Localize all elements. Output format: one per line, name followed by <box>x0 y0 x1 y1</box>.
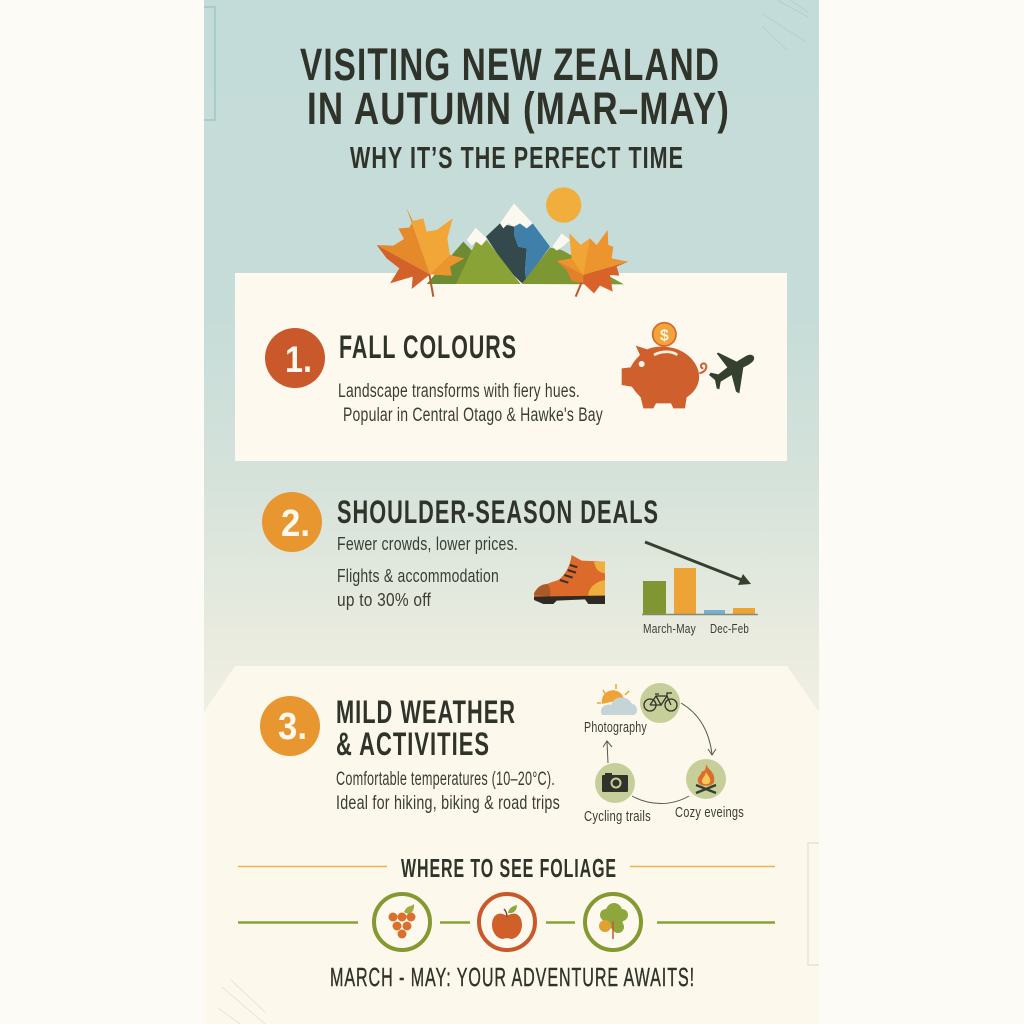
heading: mild weather and activities: & ACTIVITIES <box>336 726 490 762</box>
icon: apple <box>479 894 535 950</box>
panel: mild weather section <box>260 694 560 814</box>
text: deals description <box>337 533 518 610</box>
icon: mountains <box>427 203 624 284</box>
heading: mild weather and activities: MILD WEATHER <box>336 694 516 730</box>
icon: right maple leaf <box>557 230 628 297</box>
subtitle: WHY IT’S THE PERFECT TIME <box>350 140 684 175</box>
heading: mild weather and activities <box>336 694 516 762</box>
icon: plane <box>709 353 754 393</box>
text: weather description: Ideal for hiking, biking & road trips <box>336 793 560 814</box>
icon: piggy bank with coin: $ <box>660 328 669 345</box>
text: weather description: Comfortable temperatures (10–20°C). <box>336 769 555 790</box>
text: deals description: Fewer crowds, lower prices. <box>337 533 518 554</box>
icon: piggy bank with coin <box>622 323 706 408</box>
text: deals description: up to 30% off <box>337 589 431 610</box>
icon: hiking boot <box>534 555 605 604</box>
panel: fall colours card <box>235 273 787 461</box>
badge: number 3 <box>260 696 320 756</box>
text: fall colours description: Landscape transforms with fiery hues. <box>338 381 580 402</box>
text: deals description: Flights & accommodation <box>337 565 499 586</box>
text: fall colours description <box>338 381 603 426</box>
badge: number 1 <box>265 328 325 388</box>
icon: sun and cloud <box>597 684 637 715</box>
heading: shoulder-season deals: SHOULDER-SEASON DEALS <box>337 494 659 530</box>
title <box>300 39 730 134</box>
icon: grapes <box>374 894 430 950</box>
chart: price comparison bars: Dec-Feb <box>710 621 749 636</box>
heading: fall colours: FALL COLOURS <box>339 329 517 365</box>
footer call to action: MARCH - MAY: YOUR ADVENTURE AWAITS! <box>330 962 695 992</box>
chart: price comparison bars <box>642 568 758 636</box>
diagram: activity cycle <box>584 683 744 825</box>
title: IN AUTUMN (MAR–MAY) <box>307 83 730 134</box>
icon: left maple leaf <box>377 208 464 297</box>
icon: campfire <box>686 759 726 799</box>
icon: bicycle <box>640 683 680 723</box>
heading: where to see foliage: WHERE TO SEE FOLIAGE <box>401 853 617 883</box>
icon: tree <box>585 894 641 950</box>
foliage region connector lines <box>238 921 775 924</box>
diagram: activity cycle: Cycling trails <box>584 808 651 825</box>
badge: number 1: 1. <box>285 339 312 380</box>
icon: sun <box>546 187 581 223</box>
title: VISITING NEW ZEALAND <box>300 39 720 90</box>
arrow: falling price trend <box>645 542 751 585</box>
text: fall colours description: Popular in Central Otago & Hawke's Bay <box>343 405 603 426</box>
text: weather description <box>336 769 560 814</box>
illustration: mountains, sun and maple leaves <box>377 187 628 297</box>
diagram: activity cycle: Photography <box>584 719 647 736</box>
badge: number 2: 2. <box>281 503 310 545</box>
chart: price comparison bars: March-May <box>643 621 696 636</box>
badge: number 2 <box>262 492 322 552</box>
diagram: activity cycle: Cozy eveings <box>675 804 744 821</box>
icon: camera <box>595 763 635 803</box>
badge: number 3: 3. <box>278 706 307 748</box>
